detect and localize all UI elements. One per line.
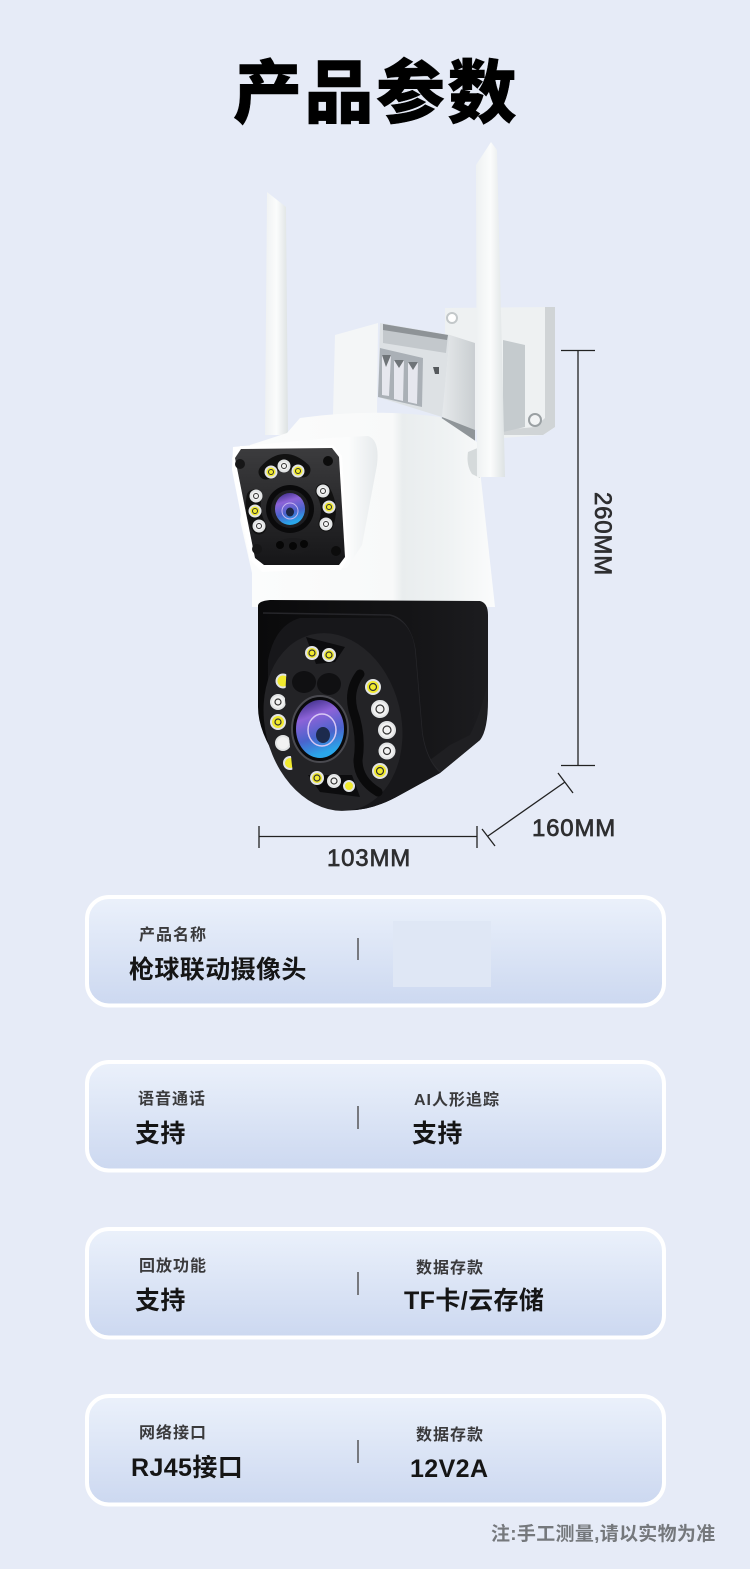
panel: network and power — [87, 1396, 664, 1504]
dimension: depth 160MM: 160MM — [532, 815, 616, 842]
right antenna — [468, 142, 505, 478]
dimension: depth 160MM — [482, 773, 616, 846]
lower lens — [292, 696, 348, 762]
panel: network and power: 12V2A — [410, 1455, 488, 1483]
panel: voice and AI tracking — [87, 1062, 664, 1170]
panel: product name — [87, 897, 664, 1006]
dimension: width 103MM — [259, 826, 477, 872]
panel: voice and AI tracking: 语音通话 — [138, 1089, 206, 1108]
panel: network and power: 数据存款 — [416, 1426, 484, 1444]
panel: product name: 产品名称 — [139, 926, 207, 944]
panel: voice and AI tracking: AI人形追踪 — [414, 1090, 500, 1109]
panel: voice and AI tracking: 支持 — [135, 1120, 186, 1148]
lower black dome — [258, 600, 488, 811]
camera product illustration — [232, 142, 555, 826]
lower LEDs — [271, 647, 395, 791]
front camera housing — [232, 436, 378, 572]
panel: playback and storage: 回放功能 — [139, 1256, 207, 1275]
upper white body — [240, 413, 495, 607]
dimension: width 103MM: 103MM — [327, 845, 411, 872]
footnote: 注:手工测量,请以实物为准 — [491, 1522, 716, 1545]
panel: playback and storage: 数据存款 — [416, 1259, 484, 1277]
panel: network and power: RJ45接口 — [131, 1454, 243, 1482]
panel: playback and storage — [87, 1229, 664, 1338]
panel: network and power: 网络接口 — [139, 1423, 207, 1442]
upper camera face plate — [232, 445, 348, 570]
dimension: height 260MM — [561, 350, 616, 766]
upper LEDs — [250, 460, 334, 532]
upper lens — [266, 485, 314, 533]
dimension: height 260MM: 260MM — [589, 492, 616, 576]
panel: playback and storage: TF卡/云存储 — [404, 1287, 544, 1315]
panel: playback and storage: 支持 — [135, 1287, 186, 1315]
panel: voice and AI tracking: 支持 — [412, 1120, 463, 1148]
left antenna — [265, 192, 288, 435]
panel: product name: 枪球联动摄像头 — [129, 955, 307, 984]
wall bracket — [333, 307, 555, 442]
title: 产品参数 — [233, 55, 519, 132]
ball face plate — [245, 618, 421, 826]
